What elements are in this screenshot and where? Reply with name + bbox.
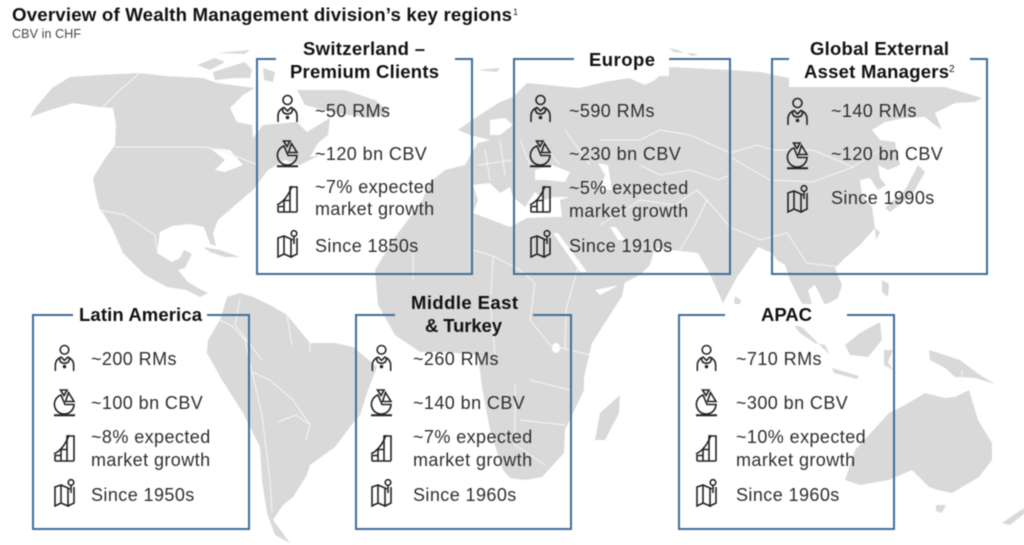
heading: Global External Asset Managers: 2 bbox=[949, 64, 955, 75]
stat: market growth: market growth bbox=[569, 201, 688, 221]
icon: pie chart bbox=[371, 390, 392, 415]
icon: growth chart bbox=[54, 435, 74, 461]
stat: RMs: ~590 RMs bbox=[569, 101, 655, 121]
stat: market growth: market growth bbox=[315, 199, 434, 219]
subtitle: CBV in CHF bbox=[12, 27, 81, 41]
heading: Switzerland: Premium Clients bbox=[290, 61, 439, 82]
stat: market growth: market growth bbox=[91, 450, 210, 470]
stat: since: Since 1850s bbox=[315, 236, 419, 256]
heading: Global External Asset Managers: Asset Managers bbox=[804, 61, 949, 82]
stat: CBV: ~230 bn CBV bbox=[569, 144, 681, 164]
heading: APAC: APAC bbox=[761, 304, 812, 325]
icon: growth chart bbox=[277, 186, 297, 212]
icon: relationship manager bbox=[788, 98, 807, 125]
stat: since: Since 1950s bbox=[91, 485, 195, 505]
icon: growth chart bbox=[530, 186, 550, 212]
icon: map bbox=[278, 231, 297, 257]
panel: Middle East & Turkey bbox=[356, 292, 571, 529]
stat: market growth bbox=[569, 178, 689, 221]
stat: CBV: ~120 bn CBV bbox=[315, 144, 427, 164]
stat: since: Since 1960s bbox=[413, 485, 517, 505]
heading: Middle East & Turkey bbox=[411, 292, 518, 336]
panel: Europe bbox=[514, 49, 730, 274]
title: Overview of Wealth Management division’s key regions bbox=[12, 4, 512, 25]
icon: pie chart bbox=[787, 143, 808, 168]
white label backings bbox=[73, 38, 970, 326]
stat: market growth: ~7% expected bbox=[413, 427, 533, 447]
stat: since: Since 1990s bbox=[831, 188, 935, 208]
icon: pie chart bbox=[277, 141, 298, 166]
panel: APAC bbox=[679, 304, 894, 529]
heading: Middle East & Turkey: Middle East bbox=[411, 292, 518, 313]
stat: market growth bbox=[91, 427, 211, 470]
panel: Global External Asset Managers bbox=[772, 38, 987, 274]
heading: Middle East & Turkey: & Turkey bbox=[425, 315, 503, 336]
icon: growth chart bbox=[696, 435, 716, 461]
icon: map bbox=[697, 480, 716, 506]
stat: RMs: ~260 RMs bbox=[413, 349, 499, 369]
panel: Switzerland – Premium Clients bbox=[257, 38, 472, 274]
stat: CBV: ~120 bn CBV bbox=[831, 144, 943, 164]
icon: map bbox=[788, 186, 807, 212]
stat: market growth: ~8% expected bbox=[91, 427, 211, 447]
icon: relationship manager bbox=[55, 345, 74, 371]
heading: Latin America: Latin America bbox=[79, 304, 203, 325]
stat: market growth bbox=[736, 427, 866, 470]
stat: market growth bbox=[413, 427, 533, 470]
icon: relationship manager bbox=[278, 96, 297, 122]
heading: Global External Asset Managers: Global External bbox=[810, 38, 949, 59]
title: 1 bbox=[513, 7, 518, 17]
icon: map bbox=[55, 480, 74, 506]
stat: RMs: ~710 RMs bbox=[736, 349, 822, 369]
icon: map bbox=[531, 231, 550, 257]
heading: Global External Asset Managers bbox=[804, 38, 955, 82]
stat: market growth: market growth bbox=[736, 450, 856, 470]
stat: CBV: ~100 bn CBV bbox=[91, 393, 203, 413]
stat: CBV: ~140 bn CBV bbox=[413, 393, 525, 413]
heading: Switzerland: Switzerland – bbox=[303, 38, 425, 59]
heading: Europe: Europe bbox=[589, 49, 655, 70]
stat: market growth: ~7% expected bbox=[315, 177, 435, 197]
stat: market growth: ~10% expected bbox=[736, 427, 866, 447]
stat: since: Since 1960s bbox=[736, 485, 840, 505]
stat: market growth bbox=[315, 177, 435, 219]
stat: RMs: ~200 RMs bbox=[91, 349, 177, 369]
icon: pie chart bbox=[530, 141, 551, 166]
icon: pie chart bbox=[54, 390, 75, 415]
icon: relationship manager bbox=[372, 345, 391, 371]
stat: market growth: ~5% expected bbox=[569, 178, 689, 198]
stat: CBV: ~300 bn CBV bbox=[736, 393, 848, 413]
heading: Switzerland bbox=[290, 38, 439, 82]
icon: map bbox=[372, 480, 391, 506]
stat: RMs: ~140 RMs bbox=[831, 101, 917, 121]
icon: growth chart bbox=[371, 435, 391, 461]
icon: relationship manager bbox=[531, 96, 550, 122]
panel: Latin America bbox=[33, 304, 249, 529]
icon: relationship manager bbox=[697, 345, 716, 371]
stat: RMs: ~50 RMs bbox=[315, 101, 390, 121]
icon: pie chart bbox=[696, 390, 717, 415]
stat: since: Since 1910s bbox=[569, 236, 673, 256]
stat: market growth: market growth bbox=[413, 450, 532, 470]
